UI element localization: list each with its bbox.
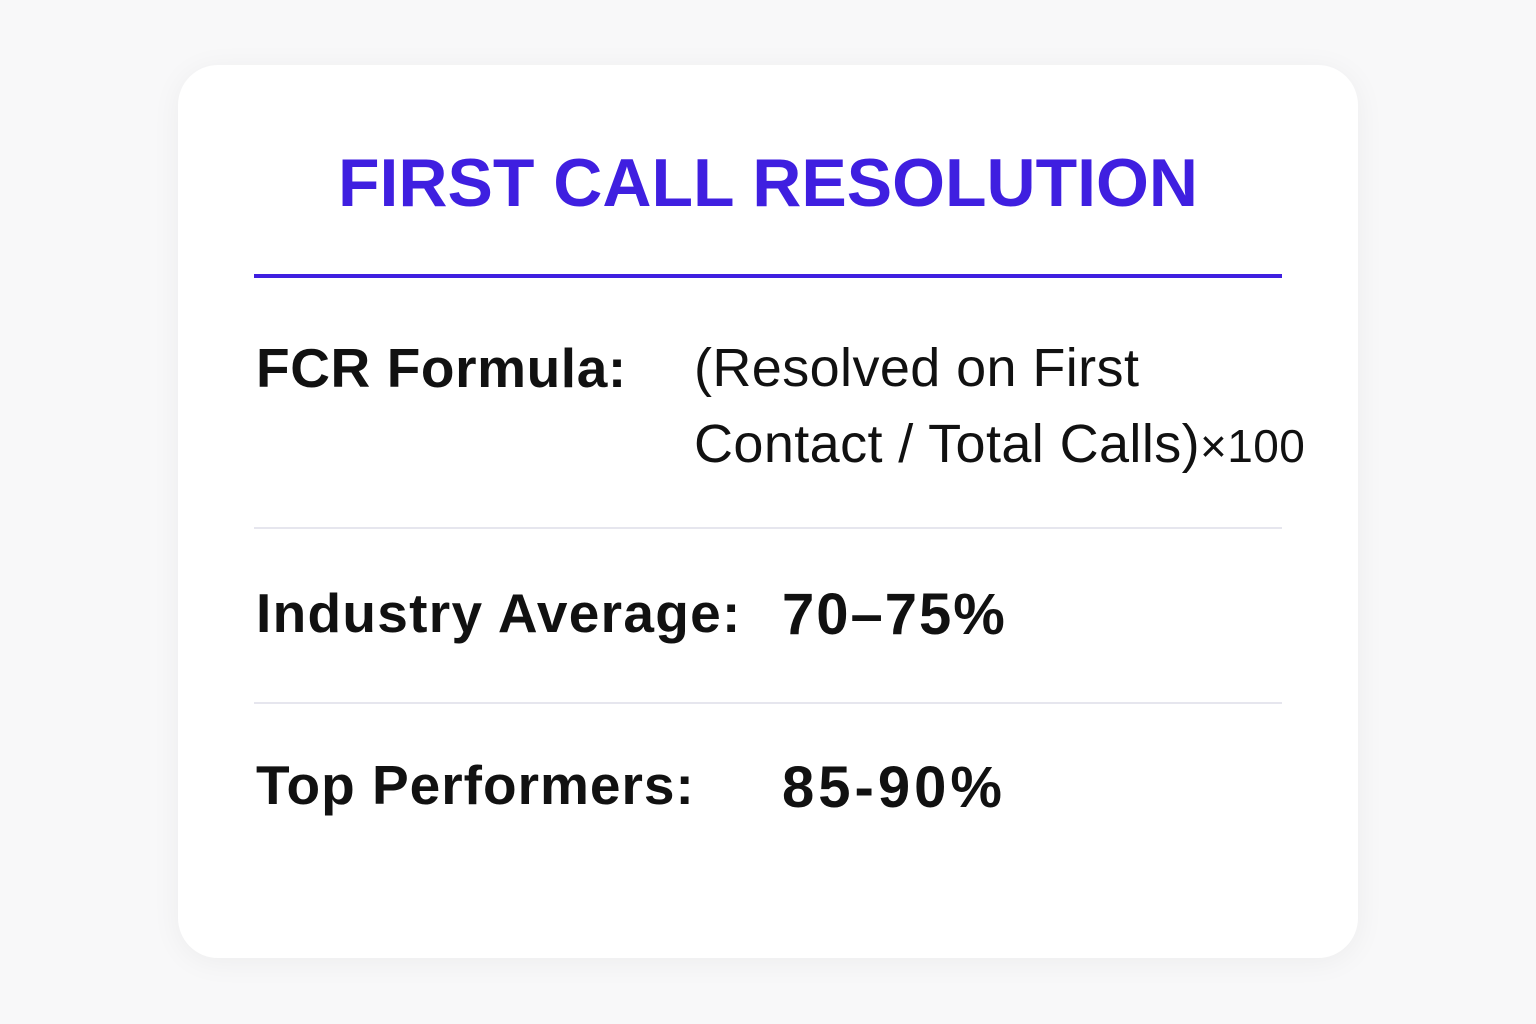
row: formula label: FCR Formula:: [256, 337, 627, 399]
row: formula text: [694, 338, 1305, 474]
row: industry average: Industry Average:: [256, 582, 742, 644]
title underline: [254, 274, 1282, 278]
value: industry average: 70–75%: [782, 582, 1007, 647]
row: formula text: Contact / Total Calls)×100: [694, 414, 1305, 474]
row: formula text: (Resolved on First: [694, 338, 1139, 398]
title: FIRST CALL RESOLUTION: [338, 145, 1198, 221]
value: top performers: 85-90%: [782, 755, 1006, 820]
row: top performers: Top Performers:: [256, 754, 695, 816]
card panel: [178, 65, 1358, 958]
